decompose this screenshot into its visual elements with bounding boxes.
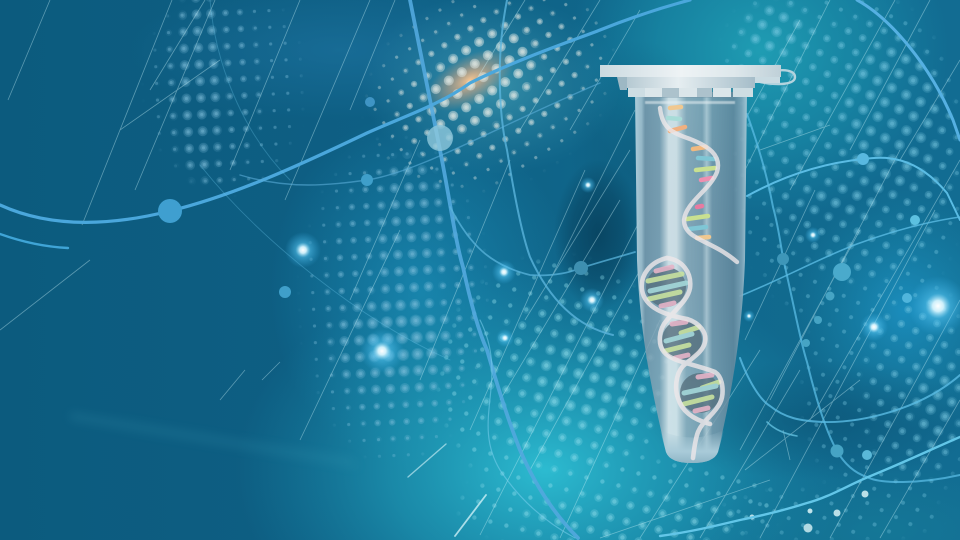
- right arcs: [857, 0, 960, 140]
- light flares: [285, 177, 960, 373]
- cap lower plate: [627, 77, 755, 88]
- main thick curve: [0, 0, 690, 222]
- DNA helix: [642, 107, 737, 458]
- cap teeth: [628, 88, 753, 97]
- cap loop: [760, 70, 795, 84]
- lower DNA dark core: [646, 267, 720, 413]
- upper DNA rungs: [668, 107, 715, 238]
- cap upper plate: [600, 65, 781, 77]
- microcentrifuge tube: [600, 65, 795, 463]
- tube bottom rim: [660, 430, 724, 463]
- cap tooth shadow: [645, 88, 733, 98]
- tube body: [635, 92, 747, 463]
- cap teeth front: [645, 88, 731, 97]
- vertical thick curve: [410, 0, 578, 538]
- light streaks: [408, 444, 486, 536]
- cap right tab: [755, 77, 780, 83]
- tube rim highlight: [645, 101, 735, 104]
- short left stroke: [0, 234, 68, 248]
- nodes on curves: [158, 97, 920, 460]
- lower DNA rungs: [648, 267, 719, 411]
- DNA strands: [642, 108, 737, 458]
- tube cap: [600, 65, 795, 104]
- secondary curve through node: [240, 83, 600, 185]
- tube sheen: [703, 100, 707, 300]
- cap left tab: [617, 77, 627, 90]
- faint arcs: [200, 165, 450, 360]
